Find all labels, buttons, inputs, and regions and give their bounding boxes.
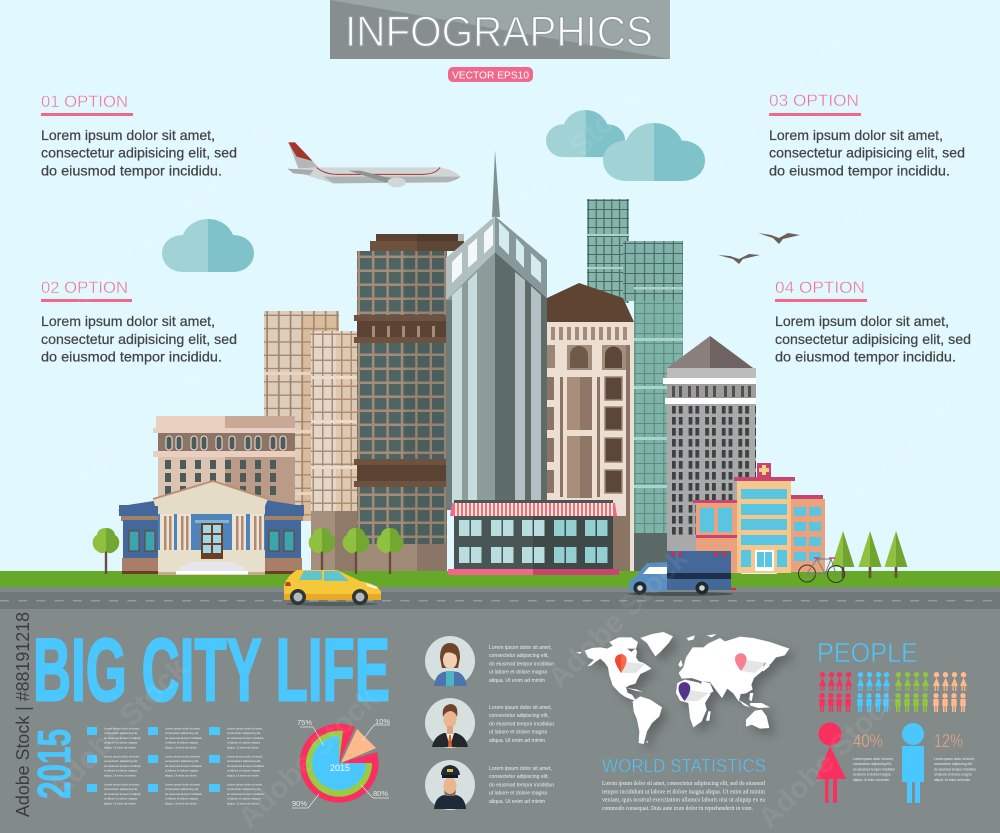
bullet grid: consectetur adipiscing elit,: [227, 759, 261, 763]
text block: option 01: Lorem ipsum dolor sit amet,: [41, 127, 215, 143]
avatar: businessman: [425, 698, 475, 748]
stock watermark: Adobe Stock: [172, 72, 325, 225]
stock watermark: Adobe Stock: [42, 652, 195, 805]
stat: 40 percent: Lorem ipsum dolor sit amet,: [853, 757, 894, 761]
bullet grid: consectetur adipiscing elit,: [227, 787, 261, 791]
avatar captions: ut labore et dolore magna: [489, 670, 547, 676]
avatar captions: ut labore et dolore magna: [489, 791, 547, 797]
world statistics paragraph: commodo consequat. Duis aute irure dolor in reprehenderit in vom.: [602, 805, 753, 812]
shop with striped awning: [448, 500, 619, 575]
stat: 12 percent: do eiusmod tempor incididun: [934, 767, 976, 771]
bullet grid: consectetur adipiscing elit,: [104, 759, 138, 763]
text block: option 04: consectetur adipisicing elit, sed: [775, 331, 971, 347]
text block: option 02: [41, 278, 237, 364]
avatar captions: aliqua. Ut enim ad minim: [489, 678, 545, 684]
cloud small upper: [546, 110, 625, 157]
bullet grid: do eiusmod tempor incididun: [227, 792, 264, 796]
avatar captions: consectetur adipiscing elit,: [489, 713, 549, 719]
avatar: woman: [425, 636, 475, 686]
map pins: [615, 653, 766, 701]
stock caption vertical: Adobe Stock | #88191218: [12, 612, 33, 817]
bullet grid: ut labore et dolore magna: [227, 797, 260, 801]
bullet grid: aliqua. Ut enim ad minim: [165, 745, 197, 749]
bullet grid: do eiusmod tempor incididun: [104, 764, 141, 768]
avatar captions: [489, 645, 554, 805]
pie chart: 2015: [330, 763, 350, 773]
bullet grid: Lorem ipsum dolor sit amet,: [104, 754, 140, 758]
pie chart: 90%: [292, 799, 307, 808]
bullet grid: aliqua. Ut enim ad minim: [104, 745, 136, 749]
heading: big city life: BIG CITY LIFE: [33, 620, 390, 720]
cloud large upper: [603, 123, 705, 181]
bullet grid: [87, 726, 264, 805]
bullet grid: aliqua. Ut enim ad minim: [165, 801, 197, 805]
world statistics paragraph: Lorem ipsum dolor sit amet, consectetur adipisicing elit, sed do eiusmod: [602, 780, 766, 787]
badge: vector eps10: VECTOR EPS10: [452, 70, 529, 82]
text block: option 03: consectetur adipisicing elit, sed: [769, 144, 965, 160]
bullet grid: ut labore et dolore magna: [104, 797, 137, 801]
avatar captions: do eiusmod tempor incididun: [489, 721, 554, 727]
hospital: [693, 463, 825, 574]
pie chart: 80%: [373, 789, 388, 798]
stock watermark: Adobe Stock: [842, 362, 995, 515]
bullet grid: do eiusmod tempor incididun: [165, 736, 202, 740]
stock watermark: Adobe Stock: [752, 682, 905, 833]
birds: [718, 233, 800, 264]
delivery van: [627, 551, 736, 596]
bullet grid: consectetur adipiscing elit,: [227, 731, 261, 735]
text block: option 04: do eiusmod tempor incididu.: [775, 348, 956, 364]
avatar captions: do eiusmod tempor incididun: [489, 661, 554, 667]
avatar captions: ut labore et dolore magna: [489, 730, 547, 736]
stat: 40 percent: ut labore et dolore magna: [853, 773, 891, 777]
cloud left: [162, 219, 254, 272]
text block: option 01: [41, 92, 237, 178]
bullet grid: consectetur adipiscing elit,: [104, 787, 138, 791]
text block: option 04: 04 OPTION: [775, 278, 865, 297]
stat: 12 percent: consectetur adipiscing elit,: [934, 762, 973, 766]
building: glass towers: [587, 199, 683, 571]
bullet grid: Lorem ipsum dolor sit amet,: [165, 754, 201, 758]
stock watermark: Adobe Stock: [232, 682, 385, 833]
stat: 40 percent: do eiusmod tempor incididun: [853, 767, 895, 771]
building: tan tower left: [264, 311, 339, 521]
stock watermark: Adobe Stock: [702, 22, 855, 175]
bullet grid: aliqua. Ut enim ad minim: [104, 773, 136, 777]
bullet grid: consectetur adipiscing elit,: [165, 759, 199, 763]
road: [0, 587, 1000, 609]
text block: option 01: do eiusmod tempor incididu.: [41, 162, 222, 178]
avatar captions: do eiusmod tempor incididun: [489, 782, 554, 788]
bullet grid: ut labore et dolore magna: [165, 769, 198, 773]
avatar captions: Lorem ipsum dolor sit amet,: [489, 766, 552, 772]
bottom grey panel: [0, 609, 1000, 833]
avatar captions: consectetur adipiscing elit,: [489, 774, 549, 780]
heading: world statistics: WORLD STATISTICS: [602, 756, 766, 776]
text block: option 02: Lorem ipsum dolor sit amet,: [41, 313, 215, 329]
bullet grid: do eiusmod tempor incididun: [227, 764, 264, 768]
text block: option 03: Lorem ipsum dolor sit amet,: [769, 127, 943, 143]
building: grey tower with pyramid roof: [663, 336, 756, 552]
avatar captions: aliqua. Ut enim ad minim: [489, 799, 545, 805]
avatar captions: aliqua. Ut enim ad minim: [489, 738, 545, 744]
stock watermark: Adobe Stock: [542, 542, 695, 695]
bullet grid: Lorem ipsum dolor sit amet,: [165, 726, 201, 730]
bullet grid: ut labore et dolore magna: [165, 741, 198, 745]
text block: option 02: 02 OPTION: [41, 278, 128, 297]
bank building: [117, 481, 305, 575]
bullet grid: Lorem ipsum dolor sit amet,: [165, 782, 201, 786]
text block: option 03: [769, 91, 965, 178]
avatar captions: Lorem ipsum dolor sit amet,: [489, 705, 552, 711]
text block: option 04: Lorem ipsum dolor sit amet,: [775, 313, 949, 329]
bullet grid: ut labore et dolore magna: [165, 797, 198, 801]
bullet grid: Lorem ipsum dolor sit amet,: [227, 782, 263, 786]
bullet grid: aliqua. Ut enim ad minim: [227, 745, 259, 749]
pie chart: [292, 717, 390, 808]
stock watermark: Adobe Stock: [492, 82, 645, 235]
text block: option 01: consectetur adipisicing elit, sed: [41, 144, 237, 160]
avatar captions: consectetur adipiscing elit,: [489, 653, 549, 659]
avatar captions: Lorem ipsum dolor sit amet,: [489, 645, 552, 651]
text block: option 03: 03 OPTION: [769, 91, 859, 110]
title banner: INFOGRAPHICS: [345, 8, 653, 56]
bullet grid: consectetur adipiscing elit,: [165, 731, 199, 735]
bullet grid: Lorem ipsum dolor sit amet,: [104, 782, 140, 786]
stock watermark: Adobe Stock: [52, 362, 205, 515]
bullet grid: do eiusmod tempor incididun: [165, 792, 202, 796]
stat: 12 percent: aliqua. Ut enim ad minim: [934, 778, 971, 782]
world statistics paragraph: [602, 780, 766, 812]
text block: option 02: do eiusmod tempor incididu.: [41, 348, 222, 364]
text block: option 04: [775, 278, 971, 364]
building: back hall behind bank: [153, 416, 295, 523]
bullet grid: ut labore et dolore magna: [104, 769, 137, 773]
sky background: [0, 0, 1000, 590]
stat: 40 percent: consectetur adipiscing elit,: [853, 762, 892, 766]
large man icon: [902, 723, 924, 803]
bullet grid: ut labore et dolore magna: [227, 769, 260, 773]
stat: 12 percent: 12%: [934, 731, 963, 751]
bullet grid: aliqua. Ut enim ad minim: [227, 773, 259, 777]
building: central skyscraper with spire: [446, 150, 547, 510]
bullet grid: Lorem ipsum dolor sit amet,: [227, 726, 263, 730]
building: tan tower second: [311, 331, 360, 574]
stat: 40 percent: 40%: [853, 731, 883, 751]
large woman icon: [816, 722, 846, 803]
bicycle: [798, 558, 844, 582]
bullet grid: consectetur adipiscing elit,: [165, 787, 199, 791]
text block: option 02: consectetur adipisicing elit, sed: [41, 331, 237, 347]
bullet grid: Lorem ipsum dolor sit amet,: [104, 726, 140, 730]
bullet grid: aliqua. Ut enim ad minim: [227, 801, 259, 805]
pie chart: 10%: [375, 717, 390, 726]
avatar: police officer: [425, 760, 475, 810]
text block: option 03: do eiusmod tempor incididu.: [769, 162, 950, 178]
stat: 40 percent: aliqua. Ut enim ad minim: [853, 778, 890, 782]
text block: option 01: 01 OPTION: [41, 92, 128, 111]
trees left: [93, 528, 403, 574]
grass: [0, 571, 1000, 588]
bullet grid: do eiusmod tempor incididun: [104, 792, 141, 796]
pie chart: 75%: [297, 718, 312, 727]
airplane: [287, 142, 461, 187]
stock watermark: Adobe Stock: [12, 222, 165, 375]
stat: 12 percent: [934, 731, 976, 782]
bullet grid: aliqua. Ut enim ad minim: [104, 801, 136, 805]
bullet grid: do eiusmod tempor incididun: [104, 736, 141, 740]
stat: 12 percent: ut labore et dolore magna: [934, 773, 972, 777]
year 2015 vertical: 2015: [28, 729, 80, 799]
bullet grid: ut labore et dolore magna: [227, 741, 260, 745]
stock watermark: Adobe Stock: [832, 92, 985, 245]
bullet grid: ut labore et dolore magna: [104, 741, 137, 745]
world statistics paragraph: tempor incididunt ut labore et dolore magna aliqua. Ut enim ad minim: [602, 788, 765, 795]
world map: [576, 632, 789, 744]
building: beige tower with brown roof: [547, 283, 634, 575]
bullet grid: do eiusmod tempor incididun: [227, 736, 264, 740]
stat: 12 percent: Lorem ipsum dolor sit amet,: [934, 757, 975, 761]
building: dark brown office tower: [354, 234, 464, 574]
taxi car: [284, 570, 381, 606]
stat: 40 percent: [853, 731, 895, 782]
world statistics paragraph: veniam, quis nostrud exercitation ullamco laboris nisi ut aliquip ex ea: [602, 796, 765, 804]
people pictogram grid: [819, 672, 967, 712]
pine trees: [832, 531, 908, 578]
bullet grid: aliqua. Ut enim ad minim: [165, 773, 197, 777]
bullet grid: do eiusmod tempor incididun: [165, 764, 202, 768]
bullet grid: consectetur adipiscing elit,: [104, 731, 138, 735]
heading: people: PEOPLE: [817, 637, 918, 668]
bullet grid: Lorem ipsum dolor sit amet,: [227, 754, 263, 758]
